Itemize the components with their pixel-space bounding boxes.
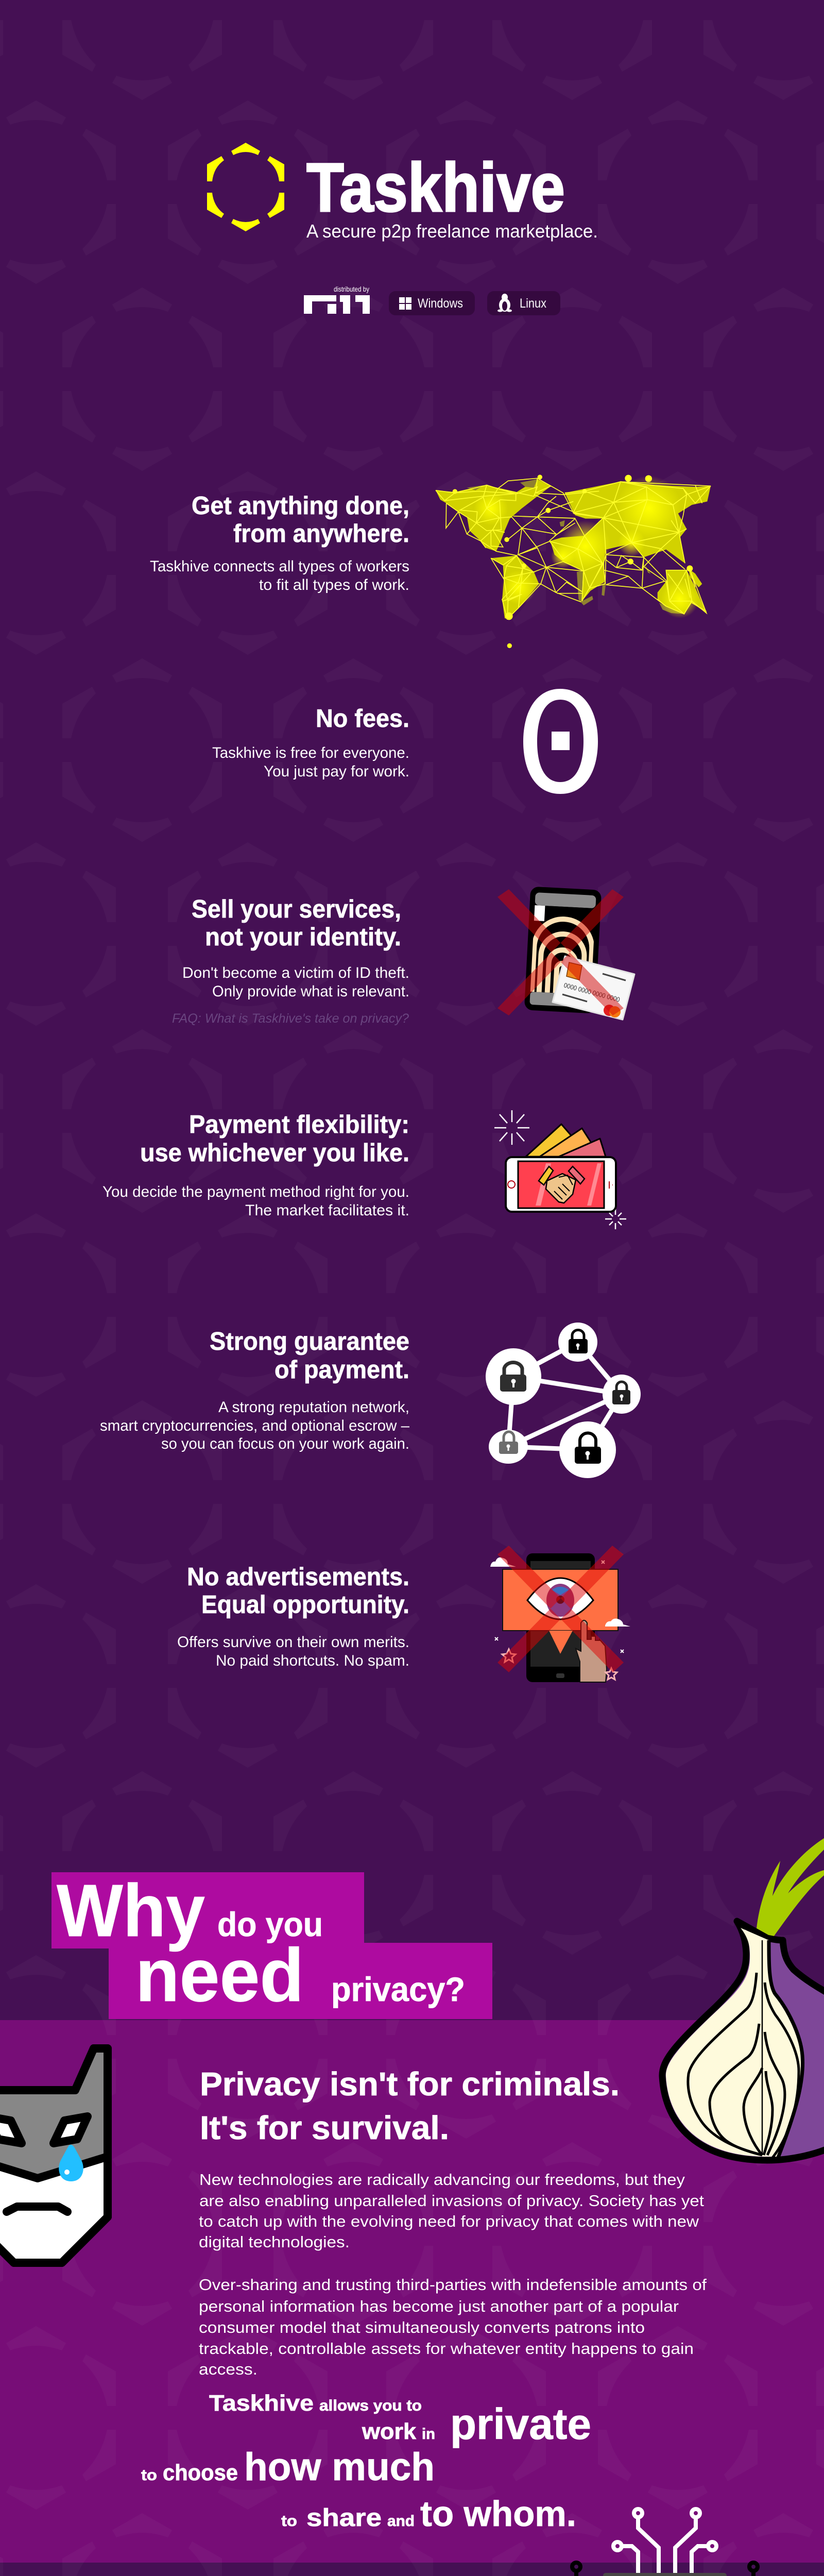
icon: zero	[523, 689, 598, 794]
text block: new technologies: to catch up with the evolving need for privacy that comes with new	[199, 2212, 699, 2230]
feature: payment flexibility: You decide the payment method right for you.	[102, 1183, 409, 1200]
callout: taskhive allows you	[141, 2391, 591, 2534]
feature: no fees: You just pay for work.	[264, 763, 409, 780]
icon: lock network	[486, 1323, 641, 1478]
callout: taskhive allows you: to	[281, 2513, 297, 2530]
feature: no advertisements: No paid shortcuts. No spam.	[216, 1652, 409, 1669]
callout: taskhive allows you: in	[422, 2426, 435, 2443]
tagline: A secure p2p freelance marketplace.	[306, 221, 598, 242]
feature: get anything done: Get anything done,	[192, 492, 409, 520]
onion	[662, 1838, 824, 2160]
text block: over-sharing: personal information has become just another part of a popular	[199, 2297, 679, 2315]
text block: new technologies: digital technologies.	[199, 2233, 350, 2251]
logo: yellow hexagon	[207, 143, 284, 231]
icon: hacked laptop circuit	[543, 2509, 786, 2576]
feature: sell your services: Sell your services,	[192, 895, 401, 923]
feature: get anything done: to fit all types of work.	[259, 577, 409, 594]
heading: why do you need privacy: do you	[217, 1905, 323, 1943]
heading: privacy isn't for criminals: It's for survival.	[200, 2109, 449, 2146]
text block: new technologies: are also enabling unparalleled invasions of privacy. Society has yet	[199, 2192, 704, 2210]
distributor logo: distributed by	[334, 285, 369, 293]
feature: no fees: Taskhive is free for everyone.	[212, 744, 409, 761]
feature: strong guarantee: of payment.	[274, 1356, 409, 1384]
button: Windows	[389, 291, 475, 315]
callout: taskhive allows you: and	[387, 2513, 415, 2530]
callout: taskhive allows you: to whom.	[420, 2494, 576, 2534]
feature: no advertisements: Equal opportunity.	[201, 1591, 409, 1619]
heading box: need privacy	[109, 1943, 492, 2019]
red cross	[497, 889, 624, 1015]
icon: tear	[59, 2145, 83, 2181]
feature: strong guarantee	[100, 1328, 409, 1452]
feature: no fees: No fees.	[316, 705, 409, 733]
text block: over-sharing	[199, 2276, 707, 2378]
callout: taskhive allows you: how much	[244, 2445, 435, 2489]
button: Windows: Windows	[418, 296, 463, 311]
feature: payment flexibility	[102, 1111, 409, 1219]
text block: over-sharing: consumer model that simultaneously converts patrons into	[199, 2318, 645, 2336]
heading: why do you need privacy: Why	[57, 1869, 205, 1952]
feature: strong guarantee: smart cryptocurrencies, and optional escrow –	[100, 1417, 409, 1434]
callout: taskhive allows you: choose	[163, 2460, 238, 2485]
heading: why do you need privacy	[57, 1869, 465, 2017]
feature: sell your services: Don't become a victim of ID theft.	[182, 964, 409, 981]
feature: get anything done	[150, 492, 409, 594]
callout: taskhive allows you: to	[141, 2467, 157, 2484]
feature: strong guarantee: Strong guarantee	[210, 1328, 409, 1355]
callout: taskhive allows you: work	[362, 2419, 417, 2444]
feature: strong guarantee: so you can focus on your work again.	[161, 1435, 409, 1452]
red cross	[497, 1546, 624, 1672]
feature: no advertisements	[177, 1563, 409, 1669]
heading: privacy isn't for criminals: Privacy isn't for criminals.	[200, 2065, 620, 2103]
callout: taskhive allows you: Taskhive	[209, 2391, 314, 2416]
feature: payment flexibility: Payment flexibility:	[189, 1111, 409, 1139]
heading: why do you need privacy: privacy?	[331, 1970, 465, 2008]
text block: over-sharing: access.	[199, 2360, 258, 2378]
button: Linux: Linux	[520, 296, 546, 311]
feature: no advertisements: Offers survive on their own merits.	[177, 1634, 409, 1651]
text block: new technologies	[199, 2171, 704, 2251]
text block: new technologies: New technologies are radically advancing our freedoms, but they	[199, 2171, 685, 2189]
text block: over-sharing: trackable, controllable assets for whatever entity happens to gain	[199, 2340, 694, 2358]
feature: sell your services: FAQ: What is Taskhive's take on privacy?	[172, 1011, 409, 1026]
feature: get anything done: Taskhive connects all types of workers	[150, 558, 409, 575]
feature: sell your services	[172, 895, 409, 1026]
distributor logo	[304, 285, 370, 314]
feature: no fees	[212, 705, 409, 780]
callout: taskhive allows you: allows you to	[319, 2397, 422, 2414]
callout: taskhive allows you: share	[306, 2504, 382, 2532]
world map network	[436, 474, 711, 648]
feature: strong guarantee: A strong reputation network,	[218, 1399, 409, 1416]
illustration: crying masked face	[0, 2048, 108, 2263]
icon: pointing hand	[576, 1620, 607, 1682]
icon: tux	[497, 294, 512, 312]
icon: credit card: 0000 0000 0000 0000	[563, 981, 621, 1004]
feature: get anything done: from anywhere.	[233, 520, 409, 548]
feature: payment flexibility: use whichever you like.	[140, 1139, 409, 1167]
icon: leaves	[756, 1838, 824, 1938]
lock	[504, 1330, 627, 1447]
feature: no advertisements: No advertisements.	[187, 1563, 409, 1591]
text block: over-sharing: Over-sharing and trusting third-parties with indefensible amounts of	[199, 2276, 707, 2294]
icon: credit card	[553, 956, 634, 1020]
icon: ad eye on phone crossed out	[490, 1546, 630, 1682]
icon: phone with handshake	[494, 1110, 626, 1229]
heading: privacy isn't for criminals	[200, 2065, 620, 2146]
feature: sell your services: Only provide what is relevant.	[212, 983, 409, 1000]
title: Taskhive	[306, 149, 565, 226]
feature: payment flexibility: The market facilitates it.	[245, 1202, 409, 1219]
button: Linux	[487, 291, 560, 315]
heading box: why do you	[52, 1872, 364, 1948]
heading: why do you need privacy: need	[135, 1933, 304, 2017]
icon: windows	[399, 297, 411, 310]
icon: phone fingerprint and card crossed out	[497, 887, 634, 1020]
feature: sell your services: not your identity.	[205, 923, 401, 951]
callout: taskhive allows you: private	[450, 2400, 591, 2448]
purple privacy band	[0, 2020, 824, 2563]
